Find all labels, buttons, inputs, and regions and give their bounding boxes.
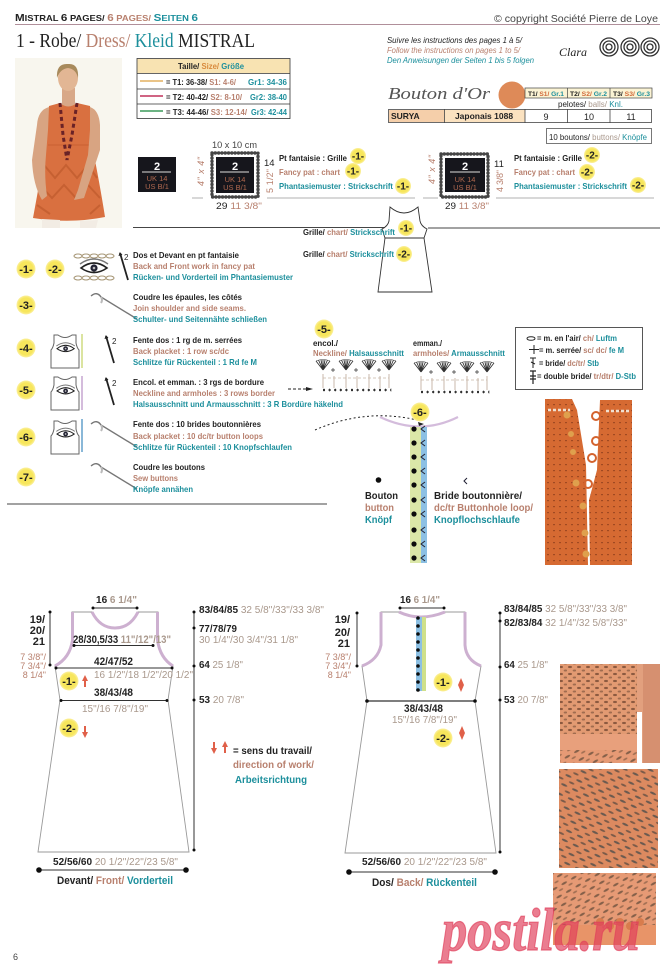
- photo: model in orange dress: [15, 58, 122, 228]
- size T1: [140, 77, 287, 87]
- back left height measure: 20/: [335, 627, 350, 639]
- mini dress chart: [303, 207, 432, 292]
- gauge swatch 1: 5 1/2": [265, 169, 275, 193]
- step 5: Halsausschnitt und Armausschnitt : 3 R Bordüre häkelnd: [133, 399, 343, 409]
- fancy pattern 1 legend: Phantasiemuster : Strickschrift: [279, 181, 393, 191]
- photo: crochet placket: [545, 399, 632, 565]
- buttonhole key: Bride boutonnière/: [434, 490, 522, 502]
- front left height measure: 8 1/4": [23, 670, 46, 680]
- schematic: back: [325, 595, 627, 889]
- step 5: [16, 376, 343, 410]
- yarn ball: [498, 82, 526, 108]
- gauge swatch 1: 29 11 3/8": [216, 201, 262, 212]
- size table: [137, 58, 290, 118]
- button key: [365, 477, 398, 526]
- step 5: 2: [112, 379, 117, 388]
- crochet chart: neckline: encol./: [313, 339, 339, 348]
- size T2: [140, 92, 287, 102]
- front width measures: 38/43/48: [94, 687, 133, 699]
- arrow: step 5 to chart: [288, 387, 313, 391]
- button key: button: [365, 502, 394, 514]
- Clara brand: Clara: [559, 45, 587, 59]
- step 1 and 2: Rücken- und Vorderteil im Phantasiemuster: [133, 272, 294, 282]
- step 1 and 2: 2: [124, 253, 129, 262]
- gauge swatch 1: 14: [264, 158, 275, 169]
- stitch legend: = m. en l'air/ ch/ Luftm: [537, 333, 617, 343]
- size T2: = T2: 40-42/ S2: 8-10/: [166, 92, 243, 102]
- step 6: [16, 419, 292, 454]
- step 7: Sew buttons: [133, 473, 178, 483]
- front width measures: 16 1/2"/18 1/2"/20 1/2": [94, 670, 193, 681]
- gauge swatch 1: [192, 140, 415, 212]
- work direction key: Arbeitsrichtung: [235, 775, 307, 786]
- fancy pattern 2 legend: -2-: [632, 180, 644, 192]
- front section badges: [60, 672, 88, 738]
- step 1 and 2: -2-: [48, 264, 62, 276]
- instructions: Follow the instructions on pages 1 to 5/: [387, 45, 521, 55]
- fancy pattern 2 legend: Fancy pat : chart: [514, 167, 575, 177]
- stitch legend: [516, 328, 642, 390]
- copyright: © copyright Société Pierre de Loye: [494, 13, 658, 25]
- fancy pattern 1 legend: Pt fantaisie : Grille: [279, 153, 347, 163]
- stitch legend: = m. serrée/ sc/ dc/ fe M: [539, 345, 624, 355]
- instructions: Suivre les instructions des pages 1 à 5/: [387, 35, 523, 45]
- front right height measures: 30 1/4"/30 3/4"/31 1/8": [199, 635, 298, 646]
- crochet chart: neckline: [313, 320, 404, 392]
- placket diagram: -6-: [413, 407, 427, 419]
- fancy pattern 2 legend: -2-: [586, 150, 598, 162]
- header: pages line: MISTRAL 6 PAGES/ 6 PAGES/ SEITEN 6: [15, 12, 198, 24]
- back hem measure: [346, 857, 498, 875]
- back hem measure: 52/56/60 20 1/2"/22"/23 5/8": [362, 857, 487, 868]
- stitch legend: = double bride/ tr/dtr/ D-Stb: [537, 371, 636, 381]
- step 4: Back placket : 1 row sc/dc: [133, 346, 229, 356]
- step 1 and 2: [16, 250, 294, 282]
- front left height measure: 19/: [30, 614, 45, 626]
- front label: Devant/ Front/ Vorderteil: [57, 875, 173, 887]
- back waist measure: 15"/16 7/8"/19": [392, 715, 457, 726]
- stitch legend: = bride/ dc/tr/ Stb: [539, 358, 599, 368]
- back right height measures: 53 20 7/8": [504, 695, 548, 706]
- needle size box: 2: [154, 161, 160, 173]
- yarn table: 11: [626, 112, 636, 122]
- front left height measure: 7 3/4"/: [20, 661, 46, 671]
- fancy pattern 2 legend: [514, 147, 646, 193]
- work direction key: direction of work/: [233, 760, 314, 771]
- instructions: [387, 35, 534, 65]
- back label: Dos/ Back/ Rückenteil: [372, 877, 477, 889]
- step 1 and 2: -1-: [19, 264, 33, 276]
- front right height measures: 53 20 7/8": [199, 695, 244, 706]
- crochet chart: armholes: armholes/ Armausschnitt: [413, 349, 505, 358]
- buttonhole key: Knopflochschlaufe: [434, 514, 520, 526]
- gauge swatch 2: 4" x 4": [427, 154, 437, 184]
- needle size box: UK 14: [147, 174, 167, 183]
- back right height measures: [498, 604, 627, 854]
- crochet chart: armholes: emman./: [413, 339, 443, 348]
- step 3: -3-: [19, 300, 33, 312]
- work direction key: [211, 741, 314, 786]
- front width measures: 42/47/52: [94, 656, 133, 668]
- size T3: Gr3: 42-44: [251, 107, 287, 117]
- fancy pattern 1 legend: [279, 148, 411, 194]
- instructions: Den Anweisungen der Seiten 1 bis 5 folgen: [387, 55, 534, 65]
- step 7: [16, 462, 205, 494]
- button key: Knöpf: [365, 514, 392, 526]
- yarn table: T2/ S2/ Gr.2: [570, 91, 607, 98]
- back waist measure: 38/43/48: [404, 703, 443, 715]
- front width measures: 28/30,5/33 11"/12"/13": [73, 634, 171, 646]
- work direction key: = sens du travail/: [233, 746, 312, 757]
- size T3: [140, 107, 287, 117]
- step 6: -6-: [19, 432, 33, 444]
- yarn spirals icon: [600, 38, 659, 56]
- back section badges: -2-: [436, 733, 450, 745]
- yarn table: T3/ S3/ Gr.3: [613, 91, 650, 98]
- photo: lace detail 2: [559, 769, 658, 868]
- gauge swatch 1: 4" x 4": [196, 156, 206, 186]
- needle size box: [138, 157, 176, 192]
- yarn table: pelotes/ balls/ Knl.: [558, 100, 623, 109]
- mini dress chart: Grille/ chart/ Strickschrift: [303, 250, 394, 259]
- gauge swatch 2: 4 3/8": [495, 170, 505, 192]
- step 4: Fente dos : 1 rg de m. serrées: [133, 335, 242, 345]
- front right height measures: 77/78/79: [199, 624, 237, 635]
- yarn table: [388, 88, 652, 123]
- back left height measure: 7 3/4"/: [325, 661, 351, 671]
- front hem measure: [36, 857, 189, 873]
- needle size box: US B/1: [145, 182, 169, 191]
- section rules: [7, 228, 660, 504]
- page number: 6: [13, 952, 18, 962]
- fancy pattern 1 legend: -1-: [397, 182, 409, 192]
- step 4: [16, 334, 257, 368]
- yarn table: SURYA: [391, 111, 420, 121]
- yarn table: 9: [543, 112, 549, 122]
- gauge swatch 2: UK 14: [455, 175, 475, 184]
- mini dress chart: Grille/ chart/ Strickschrift: [303, 228, 395, 237]
- photo: lace detail 3: [553, 873, 656, 945]
- yarn table: Japonais 1088: [455, 111, 513, 121]
- step 6: Fente dos : 10 brides boutonnières: [133, 419, 261, 429]
- back left height measure: [325, 612, 358, 680]
- size T1: Gr1: 34-36: [248, 77, 287, 87]
- yarn table: 10: [584, 112, 594, 122]
- step 4: -4-: [19, 343, 33, 355]
- size T1: = T1: 36-38/ S1: 4-6/: [166, 77, 237, 87]
- front neck measure: 16 6 1/4": [96, 595, 137, 606]
- title: 1 - Robe/ Dress/ Kleid MISTRAL: [16, 30, 255, 52]
- gauge swatch 1: 10 x 10 cm: [212, 140, 257, 151]
- size table heading: Taille/ Size/ Größe: [178, 61, 244, 71]
- step 1 and 2: Back and Front work in fancy pat: [133, 261, 255, 271]
- fancy pattern 2 legend: Pt fantaisie : Grille: [514, 153, 582, 163]
- fancy pattern 2 legend: Phantasiemuster : Strickschrift: [514, 181, 627, 191]
- buttonhole key: dc/tr Buttonhole loop/: [434, 502, 533, 514]
- buttons box: 10 boutons/ buttons/ Knöpfe: [549, 133, 648, 142]
- front right height measures: 83/84/85 32 5/8"/33"/33 3/8": [199, 605, 324, 616]
- placket diagram: [315, 402, 458, 563]
- mini dress chart: -2-: [398, 250, 410, 260]
- buttons box: [546, 128, 652, 144]
- back waist measure: [365, 699, 477, 726]
- step 7: -7-: [19, 472, 33, 484]
- front right height measures: [192, 605, 324, 852]
- step 5: Neckline and armholes : 3 rows border: [133, 388, 276, 398]
- Bouton d'Or logo: Bouton d'Or: [388, 84, 490, 103]
- buttonhole key: [434, 478, 533, 526]
- back section badges: [434, 672, 465, 748]
- back right height measures: 64 25 1/8": [504, 660, 548, 671]
- gauge swatch 2: [423, 154, 654, 212]
- gauge swatch 2: 2: [462, 161, 468, 173]
- crochet chart: armholes: [413, 339, 505, 394]
- step 5: Encol. et emman. : 3 rgs de bordure: [133, 377, 264, 387]
- photo: lace detail 1: [560, 664, 660, 763]
- schematic: front: [20, 595, 324, 887]
- front neck measure: [92, 595, 138, 610]
- gauge swatch 1: UK 14: [225, 175, 245, 184]
- back placket: [416, 616, 426, 692]
- back left height measure: 19/: [335, 614, 350, 626]
- yarn table: T1/ S1/ Gr.1: [528, 91, 564, 98]
- back left height measure: 7 3/8"/: [325, 652, 351, 662]
- front section badges: -2-: [62, 723, 76, 735]
- size T2: Gr2: 38-40: [250, 92, 287, 102]
- step 7: Coudre les boutons: [133, 462, 205, 472]
- back section badges: -1-: [436, 677, 450, 689]
- fancy pattern 1 legend: -1-: [347, 166, 359, 178]
- front left height measure: 20/: [30, 625, 45, 637]
- step 5: -5-: [19, 385, 33, 397]
- back left height measure: 21: [338, 638, 350, 650]
- step 6: Back placket : 10 dc/tr button loops: [133, 431, 263, 441]
- back neck measure: [398, 595, 446, 610]
- front left height measure: 21: [33, 636, 45, 648]
- front section badges: -1-: [62, 676, 76, 688]
- fancy pattern 1 legend: -1-: [352, 152, 364, 162]
- step 1 and 2: Dos et Devant en pt fantaisie: [133, 250, 239, 260]
- front hem measure: 52/56/60 20 1/2"/22"/23 5/8": [53, 857, 178, 868]
- step 3: Coudre les épaules, les côtés: [133, 292, 242, 302]
- back neck measure: 16 6 1/4": [400, 595, 440, 606]
- step 3: Join shoulder and side seams.: [133, 303, 246, 313]
- fancy pattern 1 legend: Fancy pat : chart: [279, 167, 340, 177]
- crochet chart: neckline: Neckline/ Halsausschnitt: [313, 349, 404, 358]
- front right height measures: 64 25 1/8": [199, 660, 243, 671]
- step 4: Schlitze für Rückenteil : 1 Rd fe M: [133, 357, 257, 367]
- front left height measure: 7 3/8"/: [20, 652, 46, 662]
- gauge swatch 2: 29 11 3/8": [445, 201, 489, 212]
- front width measures: 15"/16 7/8"/19": [82, 704, 148, 715]
- back right height measures: 83/84/85 32 5/8"/33"/33 3/8": [504, 604, 627, 615]
- step 7: Knöpfe annähen: [133, 484, 193, 494]
- gauge swatch 1: US B/1: [223, 183, 247, 192]
- gauge swatch 2: 11: [494, 159, 504, 170]
- mini dress chart: -1-: [400, 224, 412, 234]
- size T3: = T3: 44-46/ S3: 12-14/: [166, 107, 248, 117]
- step 3: [16, 292, 267, 324]
- back left height measure: 8 1/4": [328, 670, 351, 680]
- gauge swatch 1: 2: [232, 161, 238, 173]
- back right height measures: 82/83/84 32 1/4"/32 5/8"/33": [504, 618, 627, 629]
- step 6: Schlitze für Rückenteil : 10 Knopfschlaufen: [133, 442, 292, 452]
- button key: Bouton: [365, 490, 398, 502]
- fancy pattern 2 legend: -2-: [581, 168, 593, 178]
- step 3: Schulter- und Seitennähte schließen: [133, 314, 267, 324]
- step 4: 2: [112, 337, 117, 346]
- gauge swatch 2: US B/1: [453, 183, 477, 192]
- front left height measure: [20, 610, 52, 680]
- crochet chart: neckline: -5-: [317, 324, 331, 336]
- front width measures: [54, 634, 193, 715]
